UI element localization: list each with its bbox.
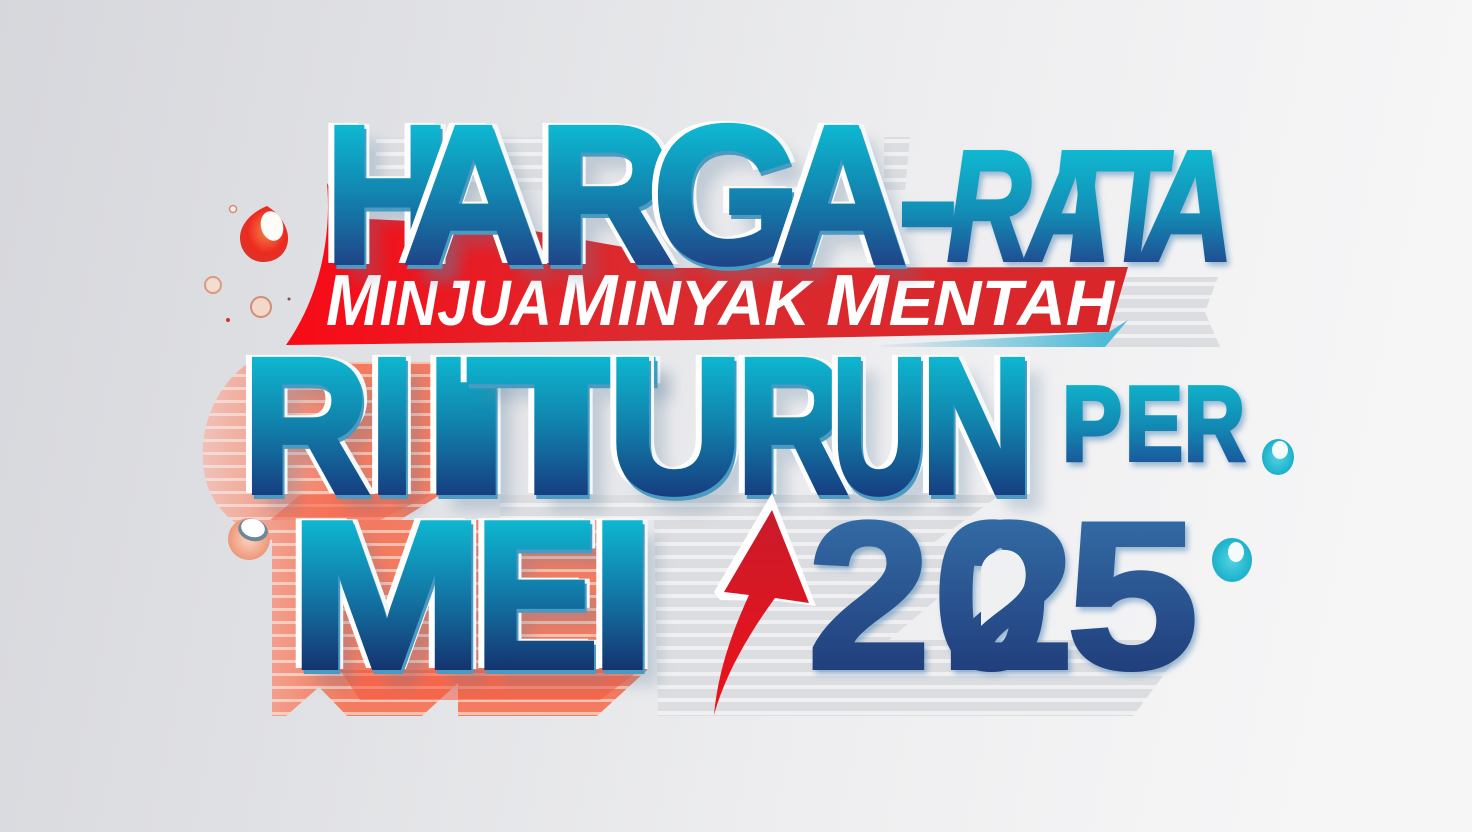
title line 2: RITURUN: I [370, 318, 414, 533]
title line 1: -RATTA: T [1108, 119, 1173, 294]
icon: teal drop lower [1212, 538, 1252, 582]
title line 1: -RATTA: R [947, 119, 1031, 294]
title line 3: year 2025: 5 [1066, 478, 1199, 713]
title line 1: -RATTA: T [1054, 119, 1119, 294]
title line 3: MEI: I [590, 479, 655, 712]
title line 1: HARGA: H [326, 86, 450, 304]
title line 2: RITURUN [243, 318, 1033, 533]
title line 3: year 2025: 0 [933, 478, 1051, 713]
title line 3: year 2025: 2 [945, 478, 1075, 713]
icon: red oil drop with bubbles [205, 206, 290, 322]
title line 3: year 2025: 2 [807, 478, 931, 713]
title line 2: RITURUN: N [921, 318, 1033, 533]
title line 1: HARGA: R [539, 86, 672, 304]
title line 1: HARGA [326, 86, 906, 304]
title line 2: RITURUN: U [832, 318, 927, 533]
title line 1: HARGA: A [777, 86, 906, 304]
title line 2: RITURUN: T [468, 318, 654, 533]
title line 1: -RATTA [894, 75, 1234, 316]
banner text: MINJUA MINYAK MENTAH: MENTAH [826, 261, 1116, 341]
title line 1: HARGA: A [404, 86, 543, 304]
title line 3: MEI [290, 479, 655, 712]
title line 2: RITURUN: R [243, 318, 369, 533]
icon: orange bubble [228, 515, 270, 560]
striped backdrop: gray bands [376, 137, 1220, 716]
striped backdrop: orange bands [203, 362, 647, 716]
banner text: MINJUA MINYAK MENTAH: MINJUA [326, 261, 552, 341]
title line 2: PER: E [1125, 365, 1183, 483]
title line 2: RITURUN: R [737, 318, 847, 533]
title line 2: PER [1062, 365, 1245, 483]
title line 2: RITURUN: I [419, 318, 513, 533]
title line 2: RITURUN: U [608, 318, 743, 533]
title line 3: MEI: M [290, 479, 484, 712]
title line 1: -RATTA: A [1139, 119, 1234, 294]
title line 1: -RATTA: A [1024, 119, 1111, 294]
banner text: MINJUA MINYAK MENTAH [326, 261, 1116, 341]
banner text: MINJUA MINYAK MENTAH: MINYAK [558, 261, 815, 341]
icon: red arrow [714, 493, 816, 715]
title line 1: -RATTA: - [894, 75, 962, 316]
icon: teal drop upper [1262, 439, 1294, 475]
title line 2: PER: R [1184, 365, 1245, 483]
red banner [286, 183, 1128, 347]
title line 2: PER: P [1062, 365, 1122, 483]
title line 3: year 2025 [807, 478, 1199, 713]
title line 1: HARGA: G [653, 86, 801, 304]
title line 3: MEI: E [475, 479, 599, 712]
